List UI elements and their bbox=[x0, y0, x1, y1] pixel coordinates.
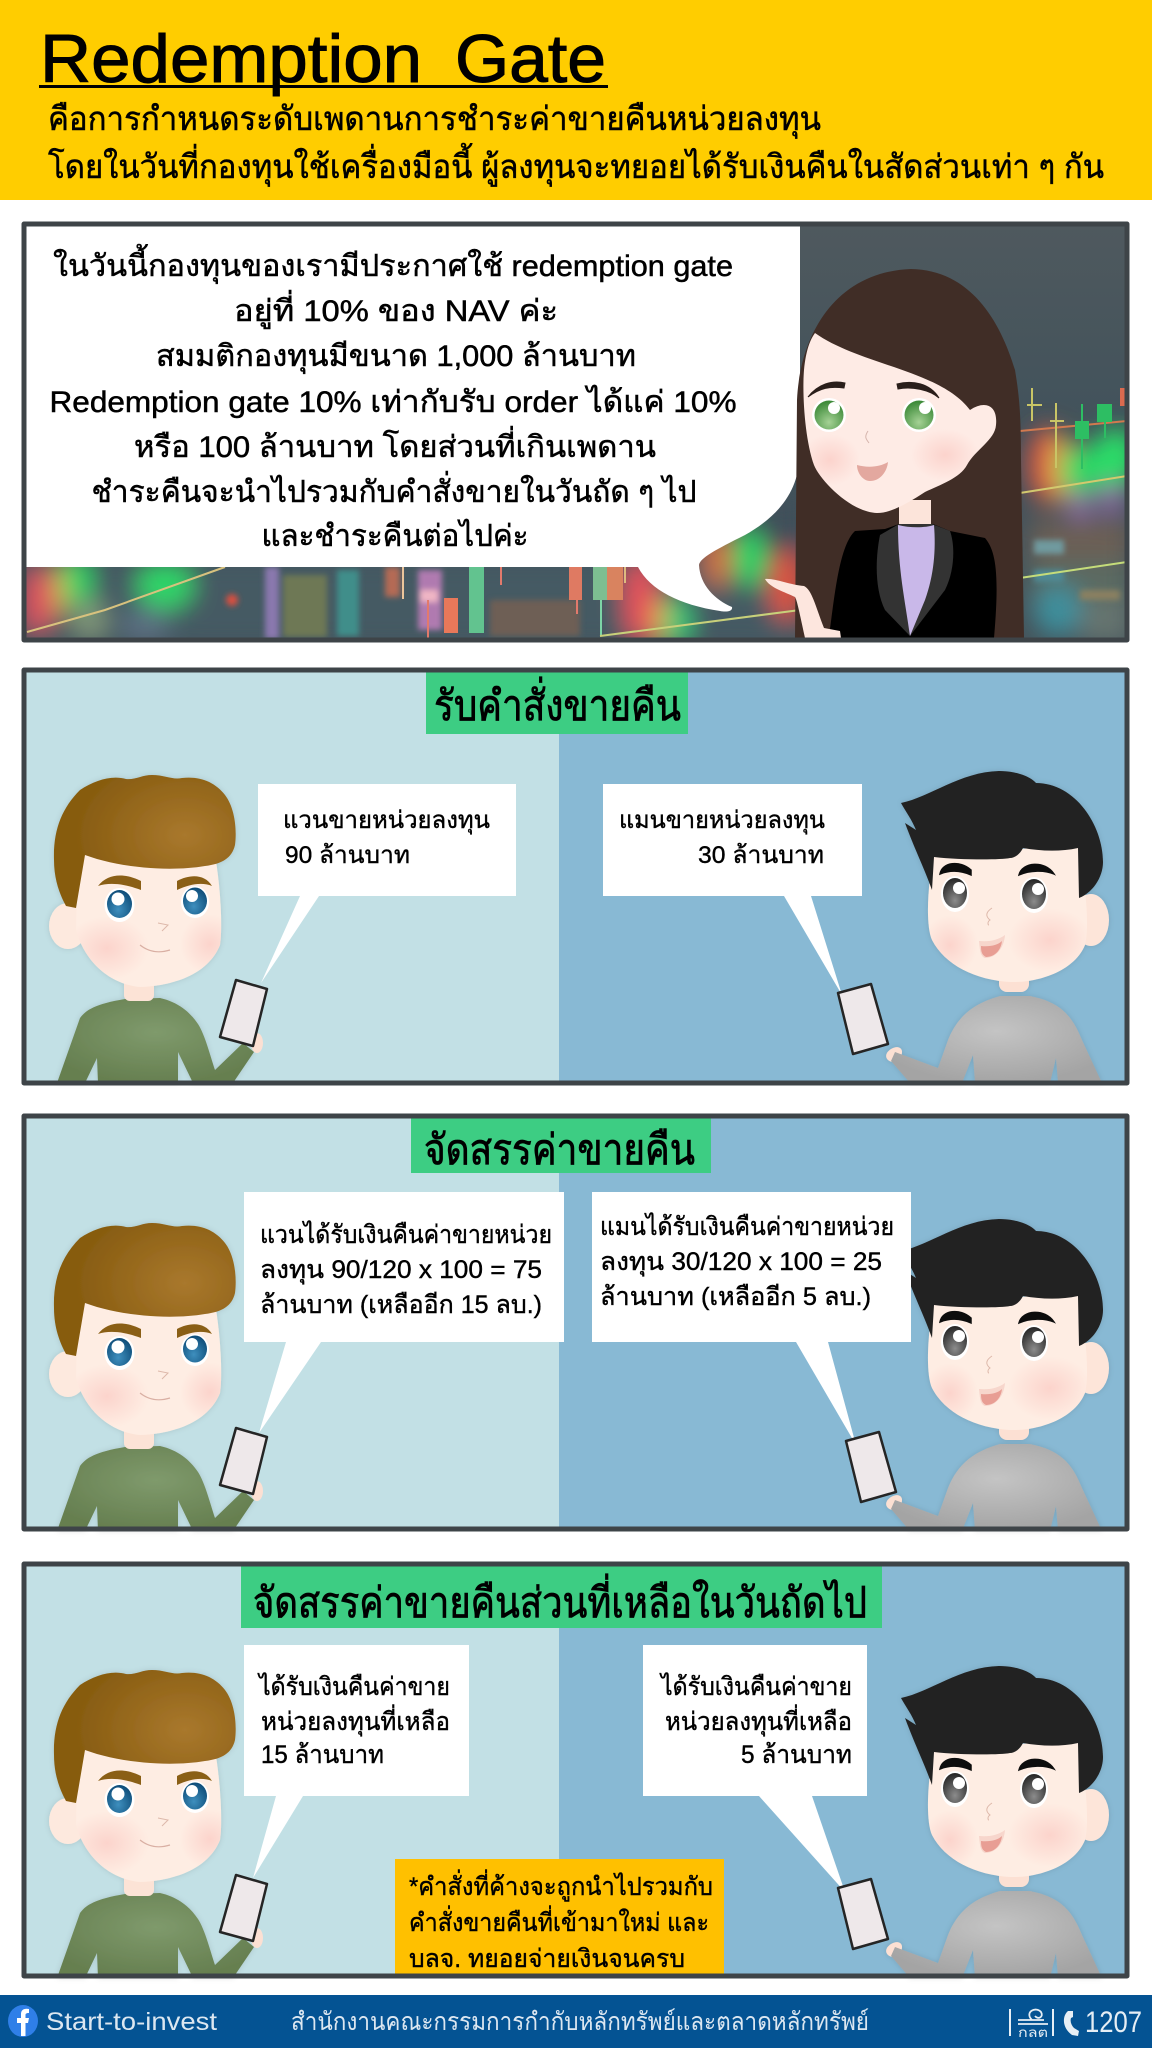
announcement text: อยู่ที่ 10% ของ NAV ค่ะ bbox=[234, 290, 558, 329]
phone: left investor bbox=[220, 1428, 267, 1501]
speech: left investor: ได้รับเงินคืนค่าขาย bbox=[257, 1672, 450, 1701]
title bbox=[39, 21, 608, 97]
character: left investor bbox=[49, 775, 254, 1083]
speech: left investor: แวนได้รับเงินคืนค่าขายหน่วย bbox=[260, 1220, 552, 1249]
announcement text: Redemption gate 10% เท่ากับรับ order ได้แค่ 10% bbox=[50, 384, 736, 419]
logo: SEC and hotline bbox=[1009, 2006, 1142, 2040]
phone: left investor bbox=[220, 1875, 267, 1948]
speech: right investor bbox=[603, 784, 862, 995]
character: right investor bbox=[886, 1219, 1109, 1531]
phone: right investor bbox=[846, 1432, 896, 1502]
speech: left investor bbox=[244, 1645, 469, 1878]
speech: right investor: 30 ล้านบาท bbox=[698, 842, 824, 869]
right background bbox=[559, 1116, 1127, 1529]
speech: left investor: หน่วยลงทุนที่เหลือ bbox=[261, 1704, 450, 1737]
speech: right investor: แมนขายหน่วยลงทุน bbox=[619, 807, 825, 835]
speech: right investor bbox=[592, 1192, 911, 1445]
phone: right investor bbox=[838, 1879, 888, 1949]
speech: right investor bbox=[643, 1645, 867, 1892]
heading: จัดสรรค่าขายคืน bbox=[424, 1126, 695, 1173]
character: right investor bbox=[886, 1666, 1109, 1978]
speech: right investor: ได้รับเงินคืนค่าขาย bbox=[659, 1672, 852, 1701]
header band bbox=[0, 0, 1152, 200]
speech: left investor: 90 ล้านบาท bbox=[285, 842, 410, 869]
character: left investor bbox=[49, 1670, 254, 1978]
announcement text: ชำระคืนจะนำไปรวมกับคำสั่งขายในวันถัด ๆ ไป bbox=[92, 471, 696, 509]
callout note: คำสั่งขายคืนที่เข้ามาใหม่ และ bbox=[409, 1905, 709, 1937]
subtitle text: โดยในวันที่กองทุนใช้เครื่องมือนี้ ผู้ลงทุนจะทยอยได้รับเงินคืนในสัดส่วนเท่า ๆ กัน bbox=[48, 143, 1104, 187]
logo: SEC and hotline: กลต bbox=[1018, 2025, 1048, 2040]
callout note: *คำสั่งที่ค้างจะถูกนำไปรวมกับ bbox=[409, 1869, 713, 1902]
announcement text: สมมติกองทุนมีขนาด 1,000 ล้านบาท bbox=[156, 340, 636, 375]
callout note bbox=[395, 1859, 724, 1976]
left background bbox=[24, 670, 559, 1083]
announcement text bbox=[50, 244, 736, 553]
character: left investor bbox=[49, 1223, 254, 1531]
right background bbox=[559, 670, 1127, 1083]
heading bbox=[241, 1566, 882, 1628]
left background bbox=[24, 1116, 559, 1529]
title: Gate bbox=[455, 21, 606, 97]
footer organisation: สำนักงานคณะกรรมการกำกับหลักทรัพย์และตลาดหลักทรัพย์ bbox=[291, 2008, 869, 2036]
speech: right investor: ลงทุน 30/120 x 100 = 25 bbox=[600, 1248, 882, 1277]
icon: facebook bbox=[8, 2005, 38, 2037]
speech: left investor: ล้านบาท (เหลืออีก 15 ลบ.) bbox=[260, 1291, 542, 1319]
character: presenter woman bbox=[765, 269, 1024, 638]
panel frame bbox=[24, 1564, 1127, 1976]
chart photo background bbox=[15, 224, 1139, 646]
panel: allocate redemption bbox=[24, 1116, 1127, 1531]
phone: right investor bbox=[838, 984, 888, 1054]
subtitle text bbox=[48, 100, 1104, 187]
panel frame bbox=[24, 224, 1127, 640]
panel: allocate remainder next day bbox=[24, 1564, 1127, 1978]
title: Redemption bbox=[40, 21, 422, 97]
announcement text: หรือ 100 ล้านบาท โดยส่วนที่เกินเพดาน bbox=[134, 426, 656, 464]
panel: announcement bbox=[15, 224, 1139, 646]
heading: รับคำสั่งขายคืน bbox=[434, 677, 681, 729]
speech bubble bbox=[26, 226, 800, 612]
character: right investor bbox=[886, 771, 1109, 1083]
heading bbox=[426, 672, 688, 734]
announcement text: และชำระคืนต่อไปค่ะ bbox=[262, 518, 528, 553]
logo: SEC and hotline: 1207 bbox=[1085, 2006, 1142, 2039]
speech: right investor: หน่วยลงทุนที่เหลือ bbox=[665, 1704, 852, 1737]
candlesticks bbox=[27, 388, 1127, 640]
panel frame bbox=[24, 670, 1127, 1083]
speech: left investor bbox=[244, 1192, 564, 1433]
subtitle text: คือการกำหนดระดับเพดานการชำระค่าขายคืนหน่วยลงทุน bbox=[48, 100, 821, 139]
panel: receive redemption orders bbox=[24, 670, 1127, 1083]
speech: left investor bbox=[258, 784, 516, 983]
footer bar bbox=[0, 1995, 1152, 2048]
speech: left investor: ลงทุน 90/120 x 100 = 75 bbox=[260, 1256, 542, 1285]
speech: right investor: แมนได้รับเงินคืนค่าขายหน่วย bbox=[600, 1212, 894, 1241]
right background bbox=[559, 1564, 1127, 1976]
left background bbox=[24, 1564, 559, 1976]
speech: right investor: 5 ล้านบาท bbox=[741, 1741, 852, 1769]
speech: left investor: 15 ล้านบาท bbox=[261, 1741, 384, 1769]
speech: right investor: ล้านบาท (เหลืออีก 5 ลบ.) bbox=[600, 1283, 871, 1311]
callout note: บลจ. ทยอยจ่ายเงินจนครบ bbox=[409, 1945, 685, 1973]
announcement text: ในวันนี้กองทุนของเรามีประกาศใช้ redemption gate bbox=[53, 244, 733, 285]
phone: left investor bbox=[220, 980, 267, 1053]
panel frame bbox=[24, 1116, 1127, 1529]
speech: left investor: แวนขายหน่วยลงทุน bbox=[283, 807, 490, 835]
footer handle: Start-to-invest bbox=[46, 2008, 217, 2036]
heading: จัดสรรค่าขายคืนส่วนที่เหลือในวันถัดไป bbox=[253, 1574, 867, 1626]
